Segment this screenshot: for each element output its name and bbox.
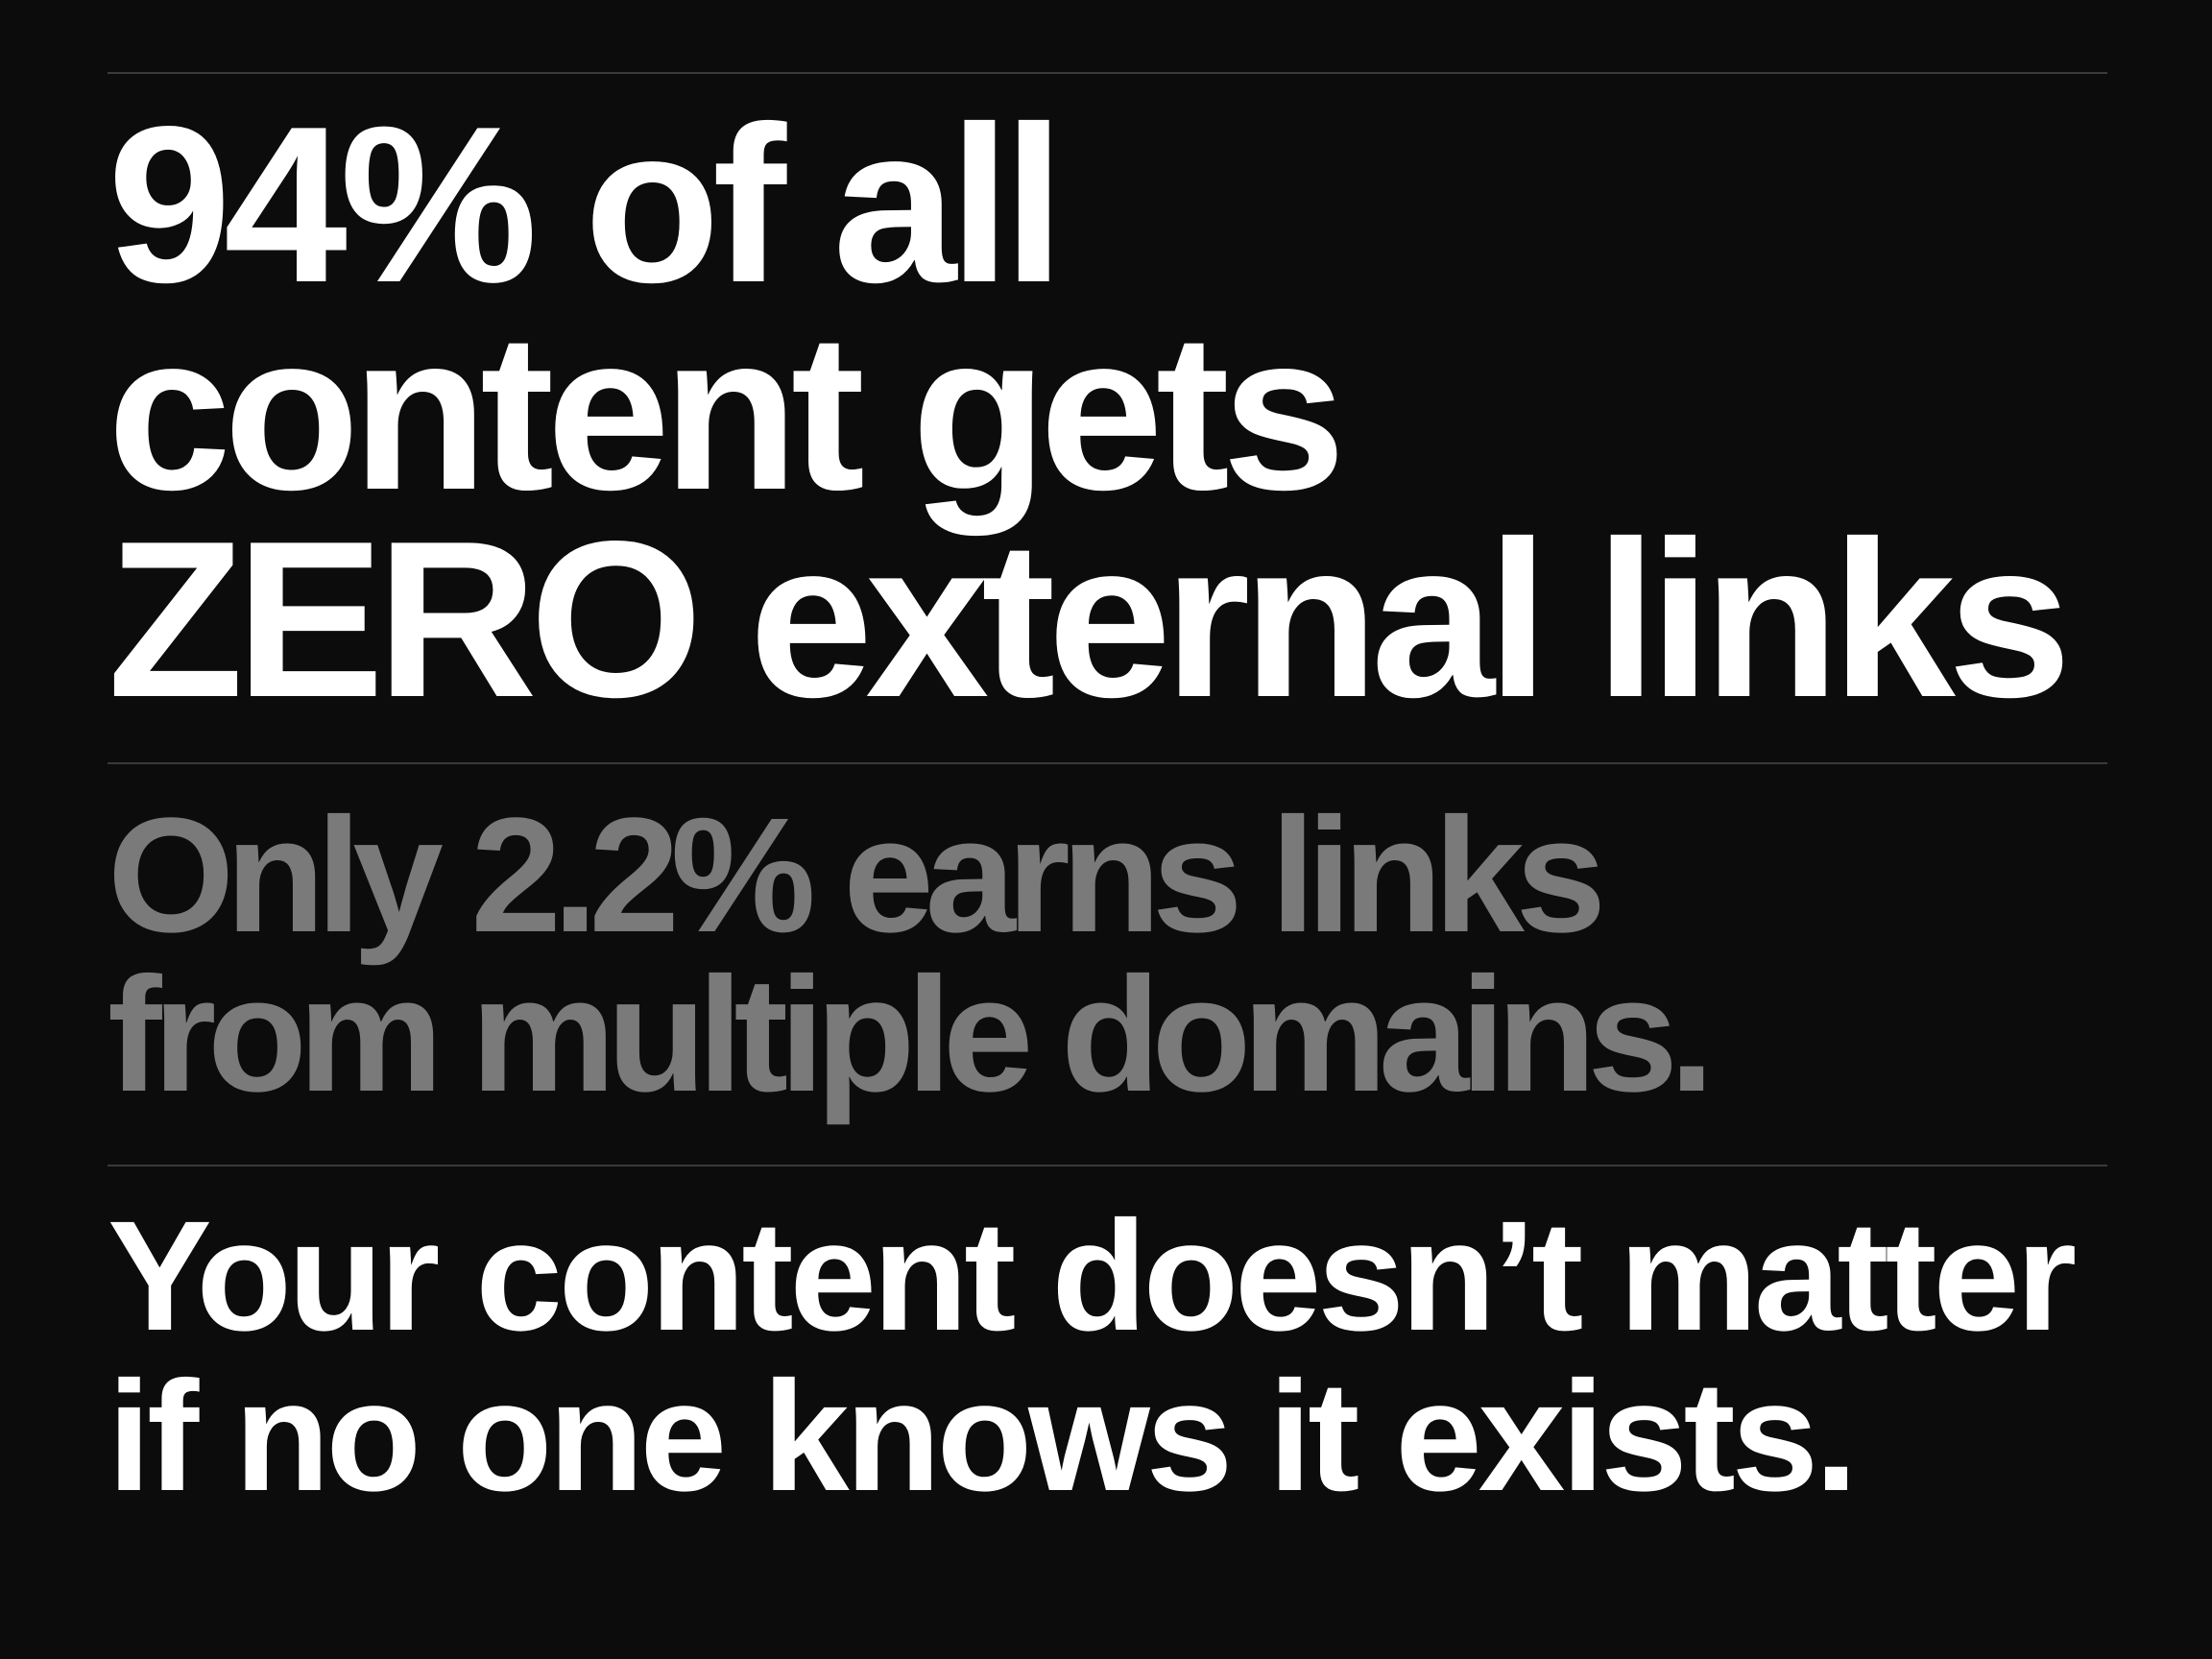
- title: 94% of all: [108, 81, 1057, 329]
- conclusion text: if no one knows it exists.: [108, 1348, 1854, 1524]
- title: ZERO external links: [108, 495, 2064, 744]
- subtitle: statistic: Only 2.2% earns links: [108, 784, 1598, 967]
- conclusion text: [108, 1188, 2075, 1524]
- subtitle: statistic: from multiple domains.: [108, 944, 1705, 1126]
- subtitle: statistic: [108, 784, 1705, 1126]
- conclusion text: Your content doesn’t matter: [108, 1188, 2073, 1363]
- title: content gets: [108, 288, 1338, 537]
- title: [108, 81, 2064, 744]
